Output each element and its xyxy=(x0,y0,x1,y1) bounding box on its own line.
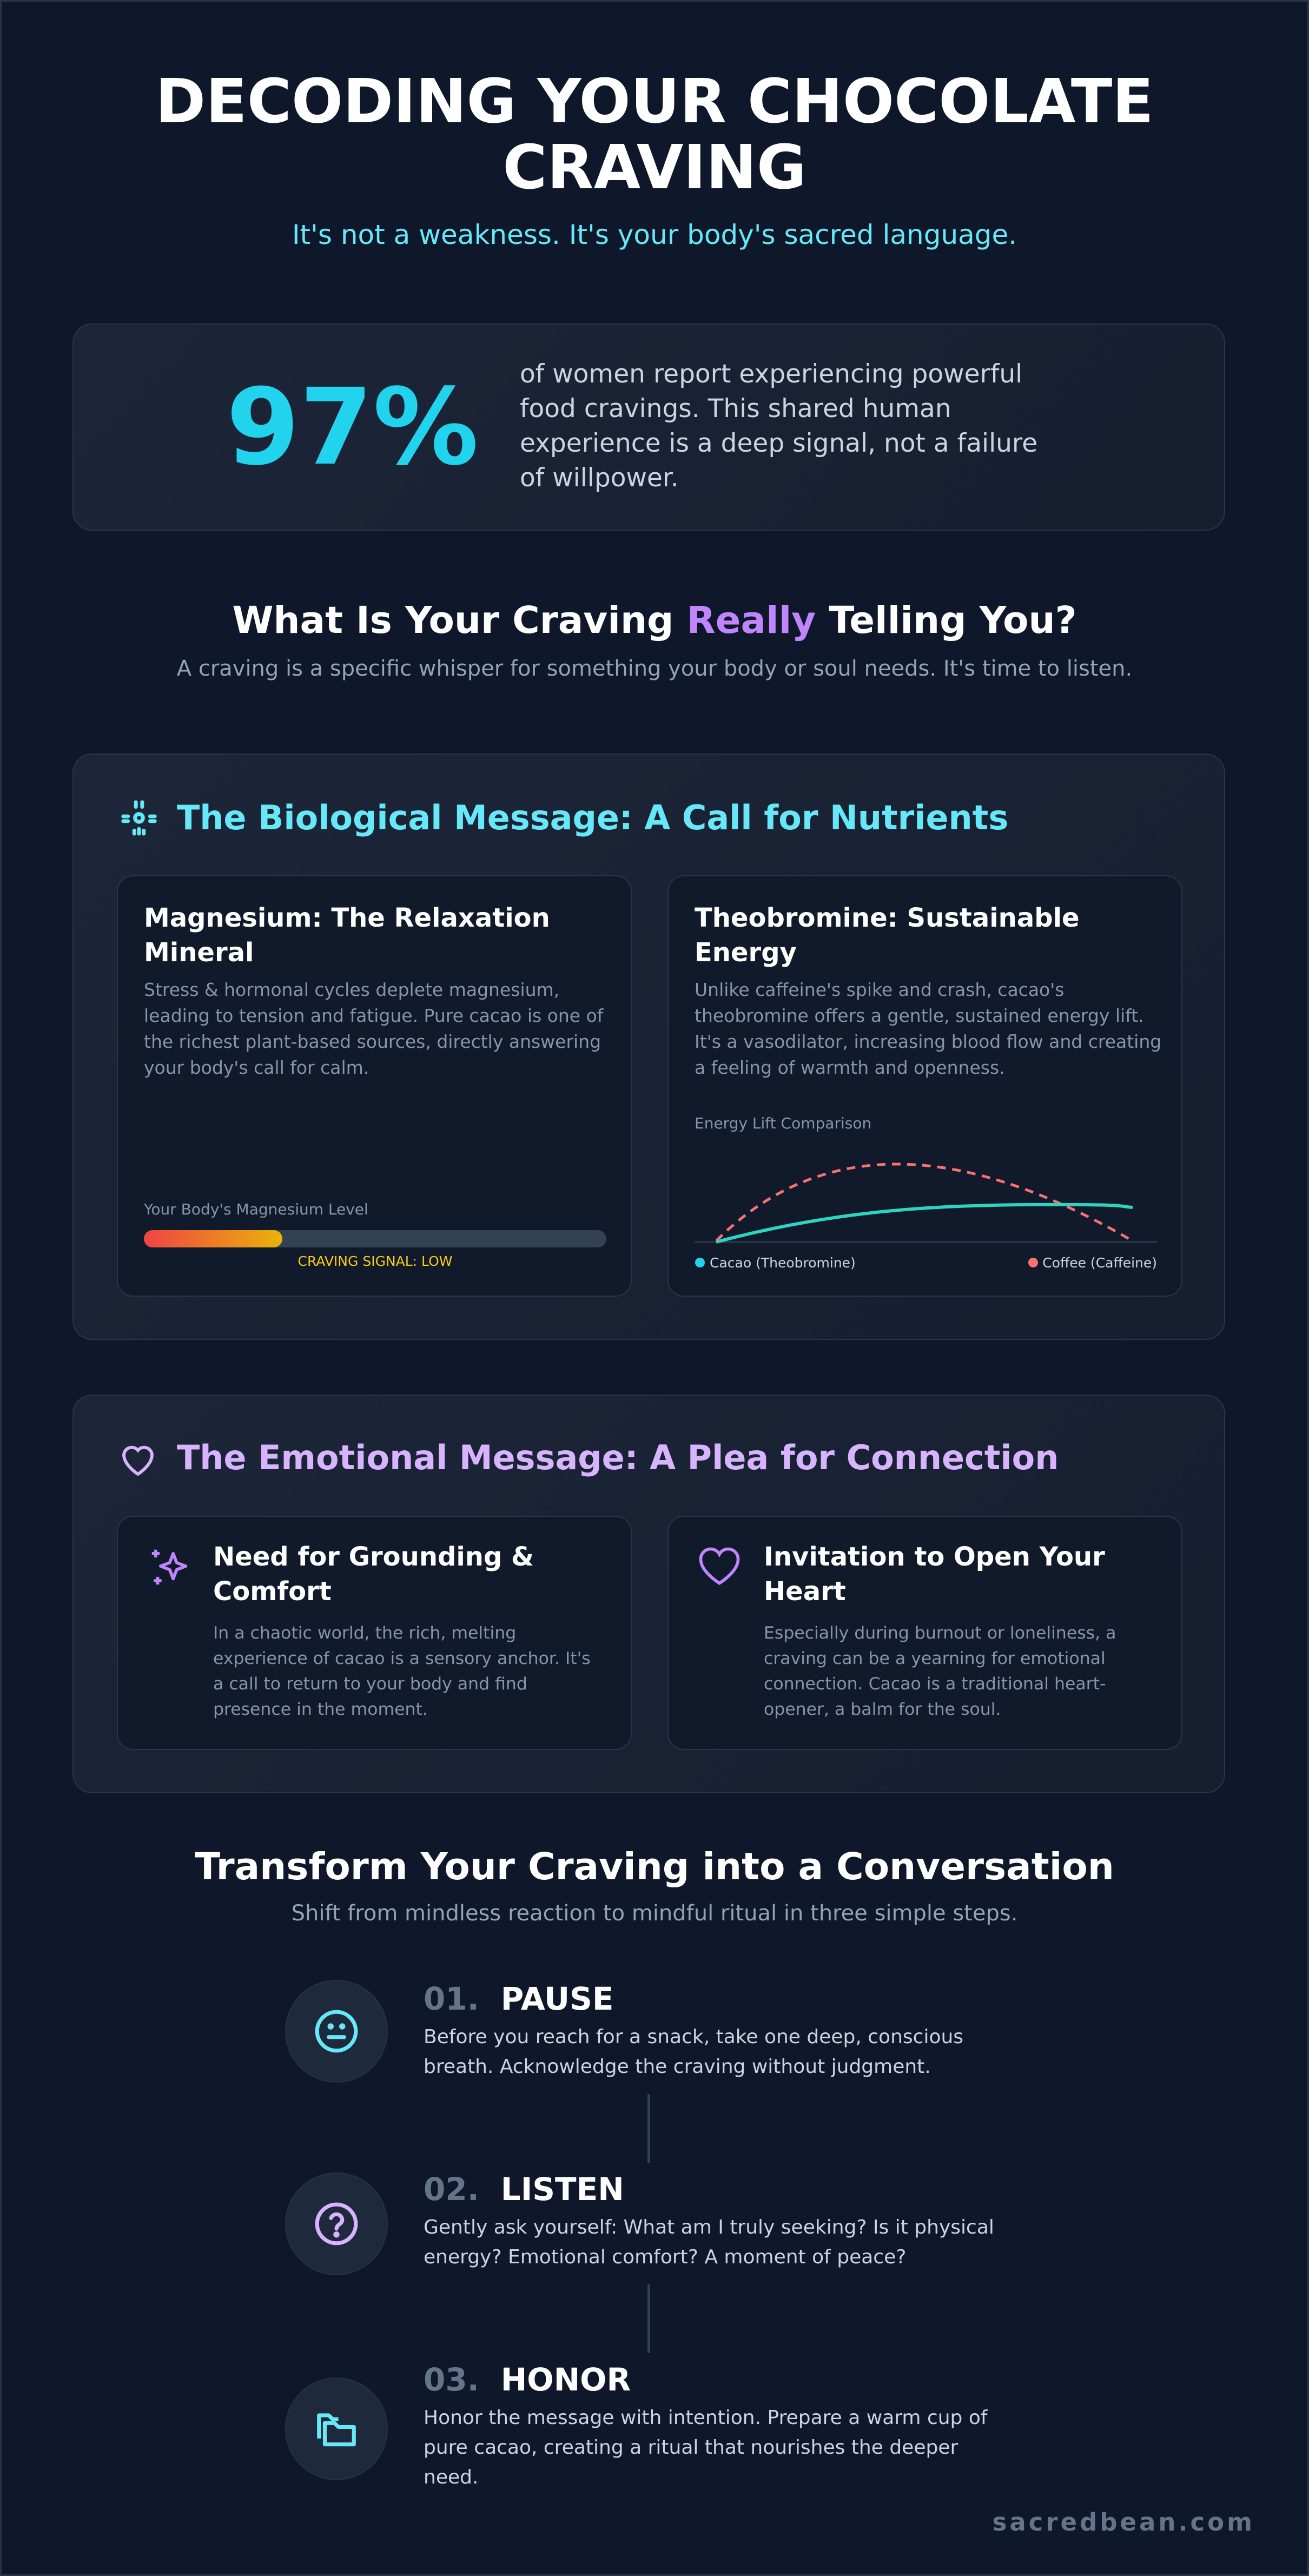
card: open heart: Especially during burnout or loneliness, a craving can be a yearning for emotional connection. Cacao is a traditional heart-opener, a balm for the soul. xyxy=(764,1623,1116,1719)
step 1: 01. PAUSE xyxy=(424,1980,614,2017)
connector lines xyxy=(647,2094,650,2163)
step 2 xyxy=(424,2171,994,2268)
subtitle: It's not a weakness. It's your body's sacred language. xyxy=(292,219,1017,250)
icon: heart outline xyxy=(699,1547,740,1585)
card: magnesium xyxy=(117,875,632,1297)
panel: biological xyxy=(72,754,1225,1340)
section subheading: A craving is a specific whisper for something your body or soul needs. It's time to listen. xyxy=(177,656,1132,681)
energy chart xyxy=(695,1114,1157,1271)
title: DECODING YOUR CHOCOLATE xyxy=(155,67,1154,137)
stat panel xyxy=(72,323,1225,531)
card: magnesium: Magnesium: The Relaxation Mineral xyxy=(144,903,550,968)
stat text: of women report experiencing powerful food cravings. This shared human experience is a deep signal, not a failure of willpower. xyxy=(520,359,1037,493)
magnesium bar xyxy=(144,1200,606,1269)
card: theobromine xyxy=(667,875,1182,1297)
icon: neutral face xyxy=(285,1980,388,2083)
step 2: Gently ask yourself: What am I truly seeking? Is it physical energy? Emotional comfort? A moment of peace? xyxy=(424,2216,994,2268)
energy chart: Cacao (Theobromine) xyxy=(710,1255,856,1271)
card: open heart: Invitation to Open Your Heart xyxy=(764,1542,1105,1607)
energy chart: Energy Lift Comparison xyxy=(695,1114,871,1132)
magnesium bar: CRAVING SIGNAL: LOW xyxy=(298,1253,452,1269)
step 1: Before you reach for a snack, take one deep, conscious breath. Acknowledge the craving without judgment. xyxy=(424,2026,963,2078)
card: theobromine: Theobromine: Sustainable Energy xyxy=(695,903,1080,968)
step 3: 03. HONOR xyxy=(424,2361,631,2398)
icon: dna xyxy=(121,800,157,836)
step 3 xyxy=(424,2361,988,2488)
heading: The Biological Message: A Call for Nutrients xyxy=(177,798,1008,837)
card: theobromine: Unlike caffeine's spike and crash, cacao's theobromine offers a gentle, sustained energy lift. It's a vasodilator, increasing blood flow and creating a feeling of warmth and openness. xyxy=(695,979,1161,1078)
stat number: 97% xyxy=(226,366,479,488)
card: open heart xyxy=(667,1516,1182,1750)
card: grounding: In a chaotic world, the rich, melting experience of cacao is a sensory anchor. It's a call to return to your body and find presence in the moment. xyxy=(213,1623,591,1719)
step 2: 02. LISTEN xyxy=(424,2171,624,2208)
icon: sparkles xyxy=(151,1549,187,1585)
section heading: What Is Your Craving Really Telling You? xyxy=(232,599,1077,642)
icon: question xyxy=(285,2172,388,2275)
card: grounding xyxy=(117,1516,632,1750)
section heading: transform: Transform Your Craving into a Conversation xyxy=(195,1845,1114,1888)
footer brand: sacredbean.com xyxy=(993,2508,1255,2537)
panel: emotional xyxy=(72,1395,1225,1793)
step 1 xyxy=(424,1980,963,2078)
title: CRAVING xyxy=(503,133,806,203)
icon: folders xyxy=(285,2377,388,2480)
card: magnesium: Stress & hormonal cycles deplete magnesium, leading to tension and fatigue. Pure cacao is one of the richest plant-based sources, directly answering your body's call for calm. xyxy=(144,979,603,1078)
icon: heart xyxy=(122,1445,154,1476)
heading: The Emotional Message: A Plea for Connection xyxy=(177,1438,1059,1477)
card: grounding: Need for Grounding & Comfort xyxy=(213,1542,534,1607)
energy chart: Coffee (Caffeine) xyxy=(1042,1255,1157,1271)
step 3: Honor the message with intention. Prepare a warm cup of pure cacao, creating a ritual that nourishes the deeper need. xyxy=(424,2407,988,2488)
title xyxy=(155,67,1154,203)
magnesium bar: Your Body's Magnesium Level xyxy=(144,1200,368,1218)
section subheading: Shift from mindless reaction to mindful ritual in three simple steps. xyxy=(292,1901,1017,1926)
